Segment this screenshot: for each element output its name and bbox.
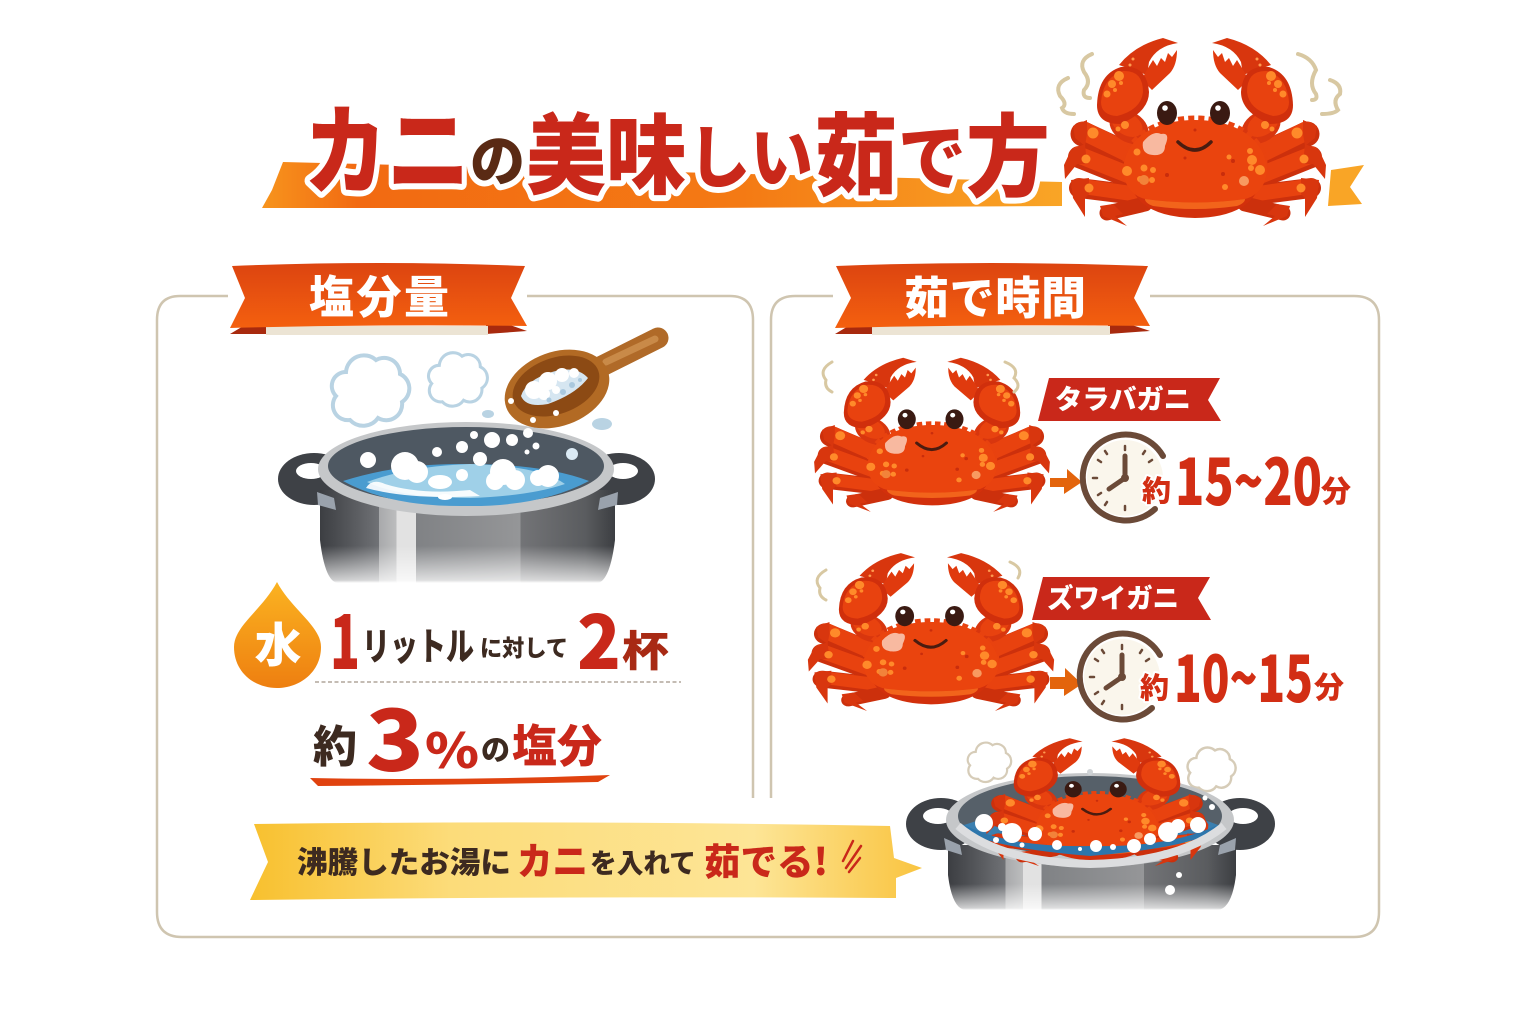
icon: water drop — [234, 582, 321, 688]
steam squiggles — [1058, 54, 1340, 114]
title text: カニ — [304, 73, 470, 215]
ratio line: に対して — [480, 629, 568, 663]
clock — [1083, 434, 1163, 520]
callout text: 沸騰したお湯に — [297, 838, 511, 882]
pot handles — [278, 453, 655, 505]
arrow — [1050, 668, 1082, 696]
label ribbon — [1038, 378, 1221, 421]
title text: 茹 — [814, 84, 898, 214]
title text — [304, 73, 1050, 215]
burst marks — [843, 841, 861, 872]
ribbon — [835, 325, 1150, 334]
callout text: カニ — [517, 831, 588, 886]
steam clouds — [332, 353, 487, 426]
water front — [962, 824, 1220, 856]
steam — [823, 362, 1018, 392]
drop label: 水 — [254, 607, 302, 676]
snow crab row — [808, 553, 1344, 721]
steam clouds — [968, 743, 1236, 791]
heading: boiling time — [835, 262, 1150, 335]
heading: salt amount — [230, 261, 527, 335]
title text: しい — [688, 103, 813, 202]
pot rim and interior — [946, 773, 1234, 867]
percentage line: の — [481, 727, 510, 769]
title text: で — [898, 100, 966, 205]
crab mascot with steam — [1058, 38, 1340, 226]
pot rim and water — [318, 422, 614, 516]
label text: タラバガニ — [1055, 378, 1191, 417]
pot handles — [906, 798, 1275, 850]
crab: tarabagani — [814, 358, 1050, 512]
ratio line: 杯 — [622, 618, 669, 679]
illustration: crab in boiling pot — [906, 738, 1275, 910]
arrow — [1050, 469, 1082, 494]
bubbles — [360, 428, 578, 500]
title text: 美味 — [526, 86, 686, 213]
dashed divider — [315, 681, 681, 683]
heading text: 茹で時間 — [904, 262, 1086, 327]
title text: の — [470, 117, 525, 198]
pot body — [948, 845, 1236, 910]
steam — [817, 562, 1020, 600]
ratio line: 1 — [330, 584, 360, 691]
label text: ズワイガニ — [1047, 577, 1179, 616]
time: 10~15 — [1174, 629, 1313, 721]
label ribbon — [1032, 577, 1211, 620]
ratio line: 2 — [577, 584, 621, 691]
bubbles — [975, 769, 1215, 853]
time: 15~20 — [1175, 432, 1322, 524]
time: 分 — [1321, 467, 1351, 511]
underline swoosh — [310, 775, 610, 786]
time: 約 — [1142, 468, 1171, 510]
title text: 方 — [966, 85, 1050, 215]
heading text: 塩分量 — [309, 261, 449, 326]
time: 約 — [1140, 665, 1169, 707]
ribbon tail — [1328, 165, 1364, 206]
ribbon shape — [250, 822, 922, 900]
ratio line — [330, 584, 669, 691]
percentage line: 3 — [366, 675, 424, 796]
ratio line: リットル — [362, 616, 474, 671]
pot body — [320, 490, 615, 583]
title banner — [262, 73, 1364, 215]
clock — [1080, 633, 1160, 719]
wooden scoop — [494, 336, 658, 442]
percentage line: % — [425, 712, 479, 782]
salt heap — [521, 368, 588, 405]
water ratio text — [234, 582, 681, 796]
water droplets — [482, 410, 494, 418]
percentage line: 塩分 — [512, 710, 602, 775]
king crab row — [814, 358, 1351, 524]
ribbon — [230, 325, 527, 334]
time: 分 — [1314, 663, 1344, 707]
panel frames — [157, 296, 1379, 937]
callout text: を入れて — [590, 842, 696, 881]
crab in pot — [986, 738, 1208, 866]
percentage line: 約 — [313, 711, 357, 775]
title ribbon — [262, 162, 1062, 208]
illustration: boiling pot with salt scoop — [278, 336, 658, 583]
crab — [1064, 38, 1326, 226]
yellow callout ribbon — [250, 822, 922, 900]
percentage line — [313, 675, 602, 796]
callout text — [297, 831, 828, 886]
crab: zuwaigani — [808, 553, 1054, 711]
callout text: 茹でる! — [704, 832, 828, 886]
